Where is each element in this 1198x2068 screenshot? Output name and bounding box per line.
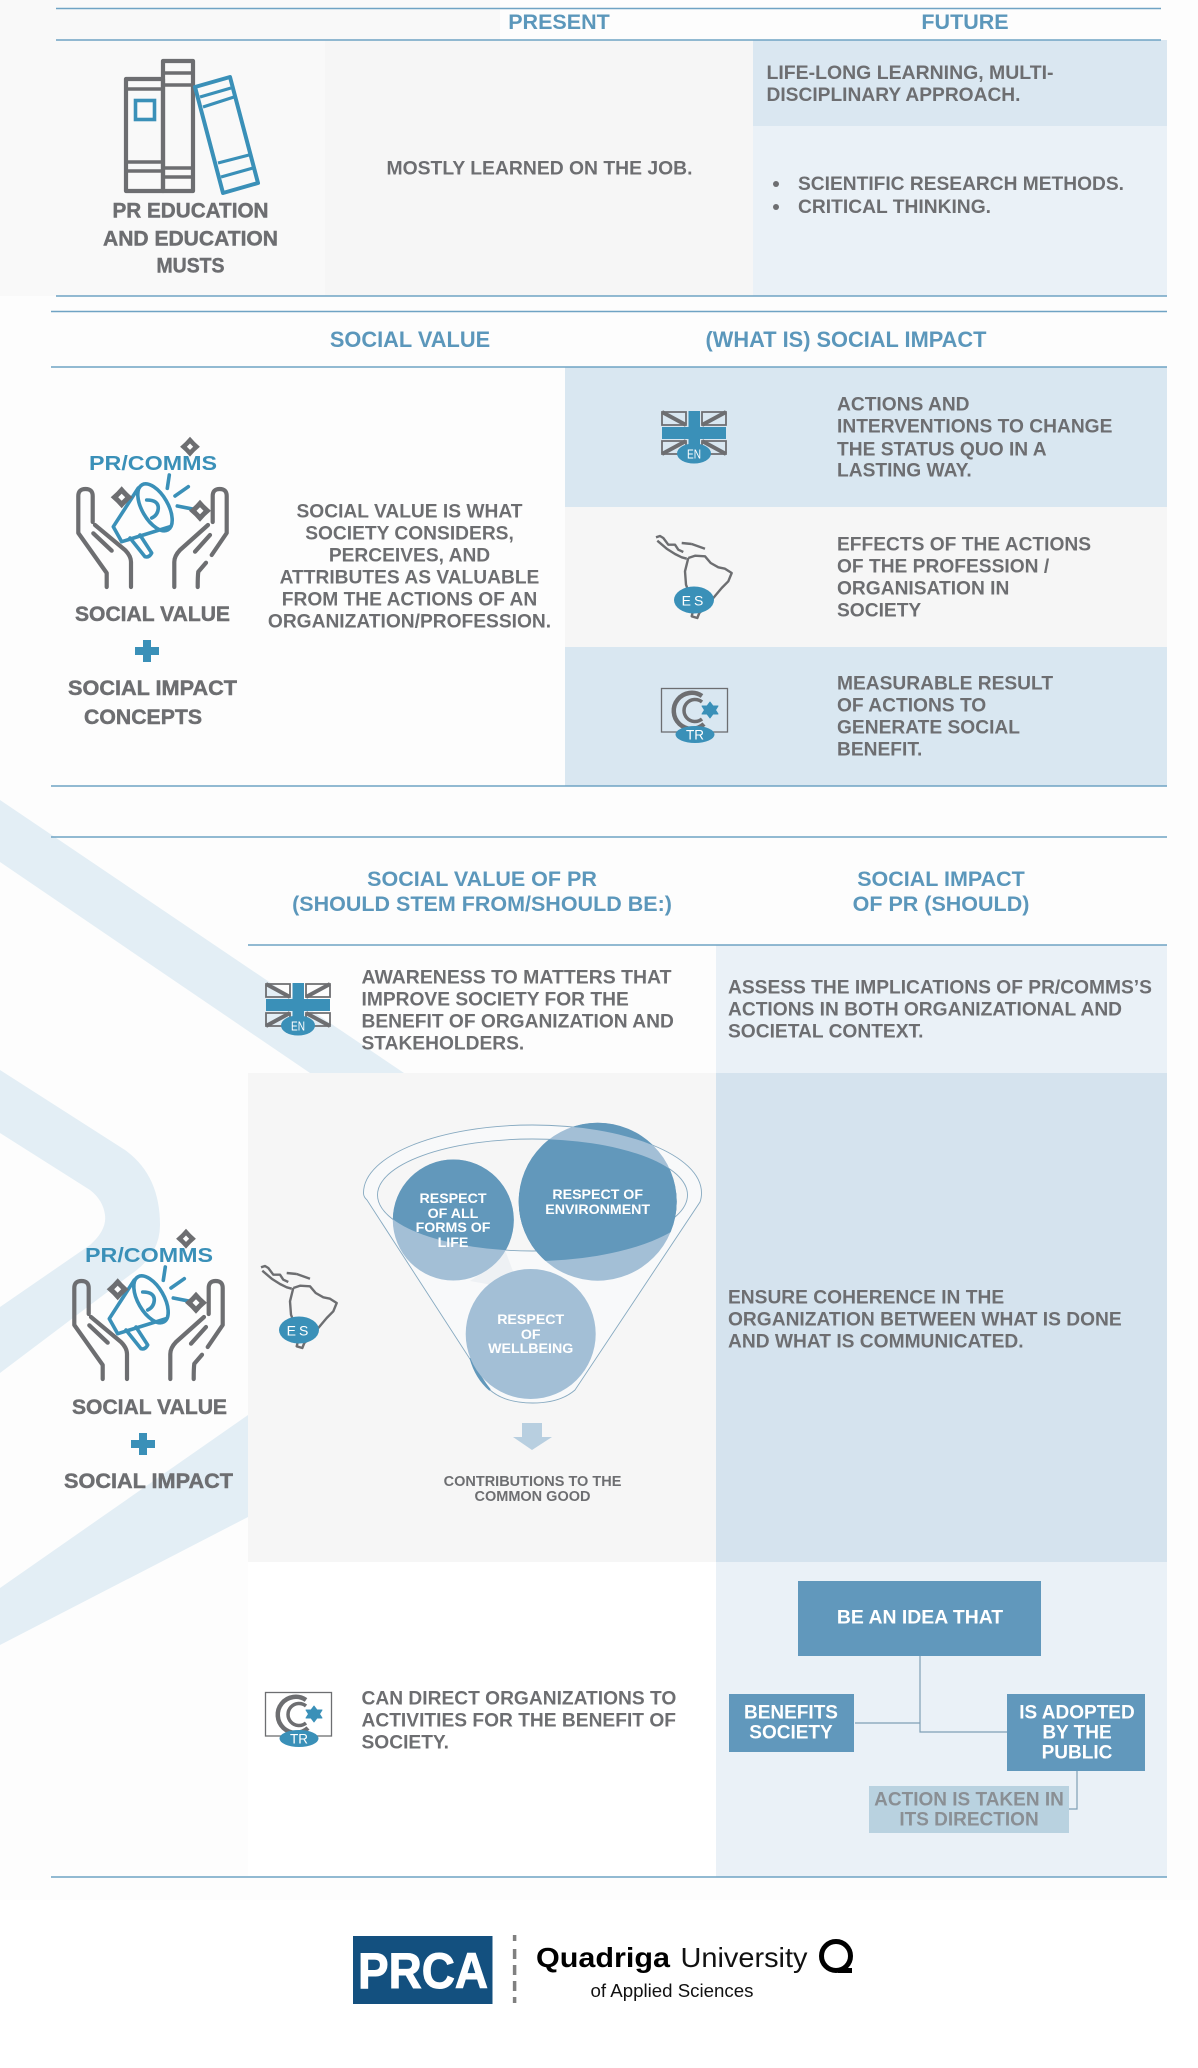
panel: social value and social impact concepts (51, 312, 1167, 786)
future text: bullets (773, 174, 1124, 218)
heading: future: FUTURE (921, 10, 1009, 34)
icon: hands with megaphone: PR/COMMS (85, 1244, 213, 1267)
icon caption (103, 200, 278, 278)
social impact definition: TR: MEASURABLE RESULT (837, 674, 1053, 694)
social value text: EN: BENEFIT OF ORGANIZATION AND (362, 1012, 674, 1032)
social impact definition: TR: OF ACTIONS TO (837, 696, 986, 716)
circle: respect of wellbeing: WELLBEING (488, 1341, 573, 1357)
social value text: EN: STAKEHOLDERS. (362, 1034, 524, 1054)
social value definition: PERCEIVES, AND (329, 546, 490, 566)
heading: present: PRESENT (508, 10, 610, 34)
heading: what is social impact: (WHAT IS) SOCIAL IMPACT (706, 327, 987, 352)
social impact text: assess implications: SOCIETAL CONTEXT. (728, 1022, 923, 1042)
box: be an idea that: BE AN IDEA THAT (837, 1606, 1003, 1628)
social impact definition: ES (837, 534, 1091, 622)
future text: life-long learning (766, 63, 1054, 106)
social value definition: FROM THE ACTIONS OF AN (282, 590, 537, 610)
social value text: EN: IMPROVE SOCIETY FOR THE (362, 990, 629, 1010)
social impact text: assess implications: ACTIONS IN BOTH ORGANIZATIONAL AND (728, 1000, 1122, 1020)
circle: respect of wellbeing: OF (521, 1327, 541, 1343)
funnel diagram (364, 1123, 702, 1403)
icon caption (68, 603, 237, 729)
social value definition: ATTRIBUTES AS VALUABLE (280, 568, 540, 588)
social impact text: ensure coherence: ENSURE COHERENCE IN THE (728, 1288, 1004, 1308)
social impact text: ensure coherence: ORGANIZATION BETWEEN WHAT IS DONE (728, 1310, 1122, 1330)
circle: respect of environment (519, 1123, 677, 1281)
social impact definition: EN: LASTING WAY. (837, 460, 972, 482)
icon: EN flag (662, 411, 726, 464)
funnel result text: COMMON GOOD (474, 1489, 590, 1505)
heading: social value: SOCIAL VALUE (330, 327, 490, 352)
box: be an idea that (798, 1581, 1041, 1656)
icon: ES map: ES (682, 592, 706, 608)
icon: EN flag (266, 983, 330, 1036)
box: benefits society: SOCIETY (749, 1722, 833, 1744)
social impact text: assess implications: ASSESS THE IMPLICATIONS OF PR/COMMS’S (728, 978, 1152, 998)
heading: social value of PR: (SHOULD STEM FROM/SHOULD BE:) (292, 892, 672, 916)
icon caption: SOCIAL IMPACT (64, 1470, 233, 1493)
panel: social value and impact of PR (51, 837, 1167, 1877)
box: benefits society: BENEFITS (744, 1702, 838, 1724)
future text: bullets: SCIENTIFIC RESEARCH METHODS. (798, 174, 1124, 195)
circle: respect of wellbeing: RESPECT (497, 1312, 565, 1328)
box: is adopted by the public: IS ADOPTED (1019, 1702, 1135, 1724)
box: action is taken: ITS DIRECTION (899, 1810, 1039, 1830)
logo: Quadriga University: Quadriga (536, 1942, 670, 1973)
icon: EN flag: EN (291, 1018, 305, 1034)
heading: social value of PR: SOCIAL VALUE OF PR (367, 867, 597, 891)
circle: respect of all forms of life: FORMS OF (416, 1220, 491, 1236)
icon caption: MUSTS (156, 254, 224, 278)
flow diagram: be an idea (729, 1581, 1145, 1833)
social impact text: ensure coherence (728, 1288, 1122, 1352)
present text: MOSTLY LEARNED ON THE JOB. (386, 158, 692, 180)
social value text: EN: AWARENESS TO MATTERS THAT (362, 968, 672, 988)
icon: hands with megaphone: PR/COMMS (89, 452, 217, 475)
arrow: down (513, 1423, 552, 1450)
box: is adopted by the public: PUBLIC (1042, 1742, 1113, 1764)
icon caption (64, 1396, 233, 1493)
future text: bullets: CRITICAL THINKING. (798, 197, 991, 218)
circle: respect of all forms of life: LIFE (438, 1235, 468, 1251)
heading: social impact of PR: OF PR (SHOULD) (853, 892, 1029, 916)
icon: hands with megaphone (78, 437, 227, 587)
logo: Quadriga University: University (680, 1942, 808, 1973)
social value text: TR: CAN DIRECT ORGANIZATIONS TO (362, 1688, 676, 1710)
social impact definition: ES: ORGANISATION IN (837, 578, 1009, 600)
icon caption: SOCIAL VALUE (72, 1396, 227, 1419)
social impact definition: ES: OF THE PROFESSION / (837, 556, 1050, 578)
social value text: TR: SOCIETY. (362, 1732, 449, 1754)
box: is adopted by the public: BY THE (1042, 1722, 1112, 1744)
social impact text: assess implications (728, 978, 1152, 1042)
social impact text: ensure coherence: AND WHAT IS COMMUNICATED. (728, 1332, 1024, 1352)
icon: books (126, 61, 258, 193)
panel: PR education (56, 8, 1167, 296)
circle: respect of all forms of life (393, 1160, 514, 1280)
logo: Quadriga University (536, 1942, 852, 2001)
social value text: EN (362, 968, 674, 1054)
social value definition (268, 502, 551, 632)
funnel result text (444, 1474, 622, 1505)
box: benefits society (729, 1694, 854, 1752)
social impact definition: EN: INTERVENTIONS TO CHANGE (837, 416, 1113, 438)
icon: TR flag (662, 688, 728, 743)
circle: respect of all forms of life: OF ALL (428, 1206, 479, 1222)
icon: TR flag: TR (290, 1732, 308, 1746)
circle: respect of all forms of life: RESPECT (419, 1191, 487, 1207)
icon: hands with megaphone (74, 1229, 223, 1379)
icon: EN flag: EN (687, 446, 701, 462)
heading: social value of PR (292, 867, 672, 916)
icon: ES map (261, 1266, 337, 1348)
icon: TR flag (266, 1692, 332, 1747)
icon caption: PR EDUCATION (112, 200, 268, 222)
icon caption: AND EDUCATION (103, 228, 278, 250)
social impact definition: TR: GENERATE SOCIAL (837, 718, 1020, 738)
heading: social impact of PR: SOCIAL IMPACT (857, 867, 1025, 891)
circle: respect of wellbeing (466, 1269, 596, 1399)
icon: ES map: ES (287, 1322, 311, 1338)
social value definition: ORGANIZATION/PROFESSION. (268, 612, 551, 632)
social value text: TR (362, 1688, 676, 1754)
social impact definition: EN: THE STATUS QUO IN A (837, 440, 1047, 460)
footer logos (353, 1935, 852, 2005)
box: action is taken (869, 1786, 1069, 1833)
social impact definition: EN: ACTIONS AND (837, 394, 970, 416)
logo: PRCA: PRCA (358, 1943, 488, 1999)
social value definition: SOCIETY CONSIDERS, (305, 524, 514, 544)
circle: respect of environment: RESPECT OF (552, 1187, 643, 1203)
social impact definition: EN (837, 394, 1113, 482)
future text: life-long learning: LIFE-LONG LEARNING, MULTI- (766, 63, 1054, 84)
logo: Quadriga University: of Applied Sciences (590, 1981, 754, 2001)
social value definition: SOCIAL VALUE IS WHAT (296, 502, 523, 522)
social impact definition: ES: SOCIETY (837, 600, 921, 622)
icon caption: SOCIAL VALUE (75, 603, 230, 626)
social impact definition: ES: EFFECTS OF THE ACTIONS (837, 534, 1091, 556)
social impact definition: TR (837, 674, 1053, 760)
icon caption: CONCEPTS (84, 706, 202, 729)
icon caption: SOCIAL IMPACT (68, 677, 237, 700)
icon: TR flag: TR (686, 728, 704, 742)
future text: life-long learning: DISCIPLINARY APPROACH. (766, 85, 1020, 106)
social impact definition: TR: BENEFIT. (837, 740, 922, 760)
social value text: TR: ACTIVITIES FOR THE BENEFIT OF (362, 1710, 676, 1732)
heading: social impact of PR (853, 867, 1029, 916)
icon: ES map (656, 536, 732, 618)
box: is adopted by the public (1007, 1694, 1145, 1771)
box: action is taken: ACTION IS TAKEN IN (874, 1790, 1064, 1810)
funnel result text: CONTRIBUTIONS TO THE (444, 1474, 622, 1490)
circle: respect of environment: ENVIRONMENT (545, 1202, 650, 1218)
